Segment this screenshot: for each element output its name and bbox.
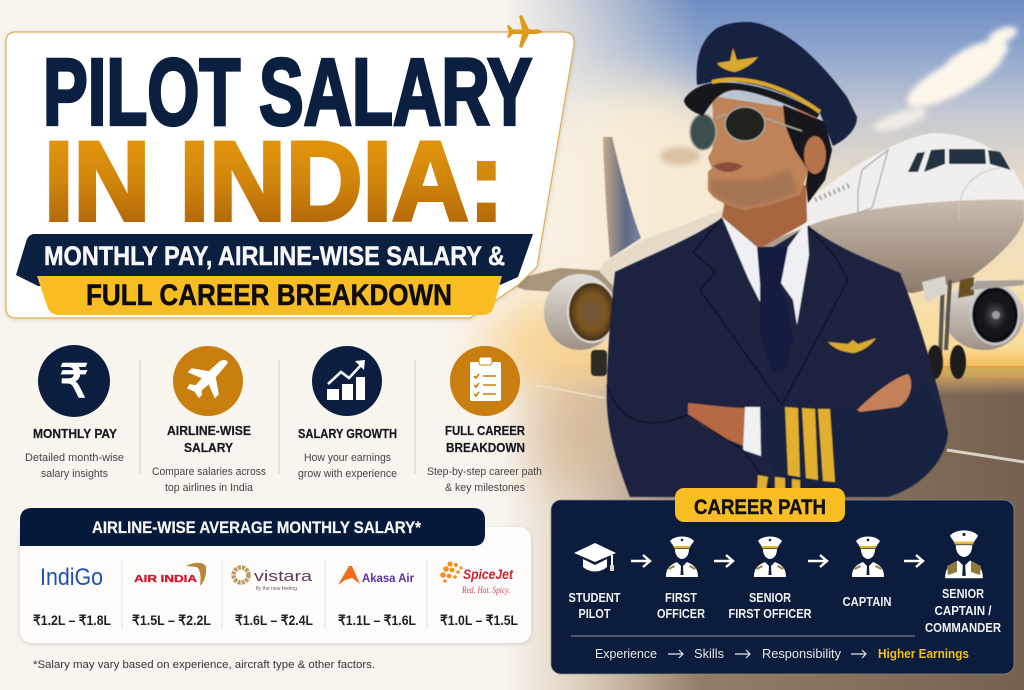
icon: small plane xyxy=(507,15,543,48)
cap xyxy=(684,22,857,146)
panel: airline salary table xyxy=(20,508,531,643)
airplane xyxy=(505,133,1024,379)
progression line: Responsibility xyxy=(762,646,841,661)
icon: checklist xyxy=(450,346,520,416)
icon: senior captain xyxy=(945,530,983,578)
feature: airline-wise salary: SALARY xyxy=(184,440,233,455)
subtitle banner navy xyxy=(16,234,533,286)
step labels: COMMANDER xyxy=(925,620,1002,635)
arrows between steps xyxy=(631,555,923,567)
logo: Vistara: fly the new feeling xyxy=(256,586,297,592)
feature: full career breakdown: BREAKDOWN xyxy=(446,440,525,455)
face xyxy=(708,96,822,210)
table header xyxy=(20,508,485,546)
feature: airline-wise salary: top airlines in India xyxy=(165,482,254,494)
feature: salary growth: grow with experience xyxy=(298,468,397,480)
salary figures: ₹1.6L – ₹2.4L xyxy=(235,612,313,628)
salary figures xyxy=(33,612,518,628)
salary figures: ₹1.5L – ₹2.2L xyxy=(132,612,211,628)
clouds xyxy=(660,23,1019,165)
hair xyxy=(783,105,832,203)
logo: Akasa Air: Akasa Air xyxy=(362,573,415,585)
logo: SpiceJet xyxy=(440,561,514,595)
stubble shading xyxy=(710,170,798,208)
step labels: CAPTAIN xyxy=(842,594,892,609)
icon: captain xyxy=(852,536,884,577)
feature: monthly pay xyxy=(25,345,124,480)
step labels xyxy=(568,586,1002,635)
footnote: *Salary may vary based on experience, aircraft type & other factors. xyxy=(33,659,375,671)
pilot portrait xyxy=(607,22,948,497)
neck xyxy=(722,185,807,250)
step labels: OFFICER xyxy=(657,606,706,621)
lapel creases xyxy=(693,218,848,405)
logo: SpiceJet: SpiceJet xyxy=(463,566,514,582)
feature: salary growth: How your earnings xyxy=(304,452,391,464)
feature: monthly pay: Detailed month-wise xyxy=(25,452,124,464)
progression line: Higher Earnings xyxy=(878,646,969,661)
feature: salary growth xyxy=(298,346,397,480)
forearm, cuff and sleeve xyxy=(688,403,747,447)
feature: full career breakdown: & key milestones xyxy=(445,482,525,494)
step labels: STUDENT xyxy=(568,590,621,605)
feature: full career breakdown xyxy=(427,346,542,494)
step labels: SENIOR xyxy=(749,590,792,605)
title line 2: IN INDIA: xyxy=(44,119,504,244)
shirt collar xyxy=(722,217,809,325)
salary figures: ₹1.1L – ₹1.6L xyxy=(338,612,416,628)
feature: full career breakdown: FULL CAREER xyxy=(445,423,526,438)
subtitle banner yellow: FULL CAREER BREAKDOWN xyxy=(86,279,452,312)
icon: airplane xyxy=(173,346,243,416)
step labels: SENIOR xyxy=(942,586,985,601)
badge: career path heading xyxy=(675,488,845,522)
icon: senior first officer xyxy=(754,536,786,577)
logo: Air India xyxy=(134,563,206,586)
progression line: Skills xyxy=(694,646,724,661)
table header: AIRLINE-WISE AVERAGE MONTHLY SALARY* xyxy=(92,518,421,537)
feature: full career breakdown: Step-by-step career path xyxy=(427,466,542,478)
feature: monthly pay: MONTHLY PAY xyxy=(33,426,117,441)
hand xyxy=(857,374,911,412)
subtitle banner navy: MONTHLY PAY, AIRLINE-WISE SALARY & xyxy=(44,241,505,271)
logo: Akasa Air xyxy=(338,566,415,585)
icon: graduation cap xyxy=(574,543,616,572)
logo: SpiceJet: Red. Hot. Spicy. xyxy=(461,585,510,595)
step labels: PILOT xyxy=(578,606,611,621)
feature: airline-wise salary: Compare salaries across xyxy=(152,466,266,478)
feature: airline-wise salary xyxy=(152,346,266,494)
logo: Air India: AIR INDIA xyxy=(134,573,198,585)
sleeve stripes xyxy=(757,407,835,490)
panel: career path xyxy=(551,488,1014,674)
logo: Vistara: vistara xyxy=(254,568,313,585)
badge: career path heading: CAREER PATH xyxy=(694,496,826,519)
salary figures: ₹1.0L – ₹1.5L xyxy=(440,612,518,628)
progression line xyxy=(595,646,969,661)
logo: Vistara xyxy=(234,568,313,592)
suit xyxy=(607,218,948,497)
necktie xyxy=(757,247,793,372)
step labels: FIRST xyxy=(665,590,697,605)
icon: first officer xyxy=(666,536,698,577)
step labels: FIRST OFFICER xyxy=(728,606,812,621)
icon: rupee: ₹ xyxy=(59,355,89,407)
feature: monthly pay: salary insights xyxy=(41,468,108,480)
salary figures: ₹1.2L – ₹1.8L xyxy=(33,612,111,628)
feature: salary growth: SALARY GROWTH xyxy=(298,426,397,441)
sunglasses xyxy=(690,107,802,150)
icon: growth chart xyxy=(312,346,382,416)
feature: airline-wise salary: AIRLINE-WISE xyxy=(167,423,251,438)
step labels: CAPTAIN / xyxy=(934,603,992,618)
title line 1: PILOT SALARY xyxy=(43,40,532,146)
wings pin xyxy=(828,338,876,353)
logo: IndiGo: IndiGo xyxy=(40,564,103,591)
title card xyxy=(6,15,574,318)
progression line: Experience xyxy=(595,646,657,661)
